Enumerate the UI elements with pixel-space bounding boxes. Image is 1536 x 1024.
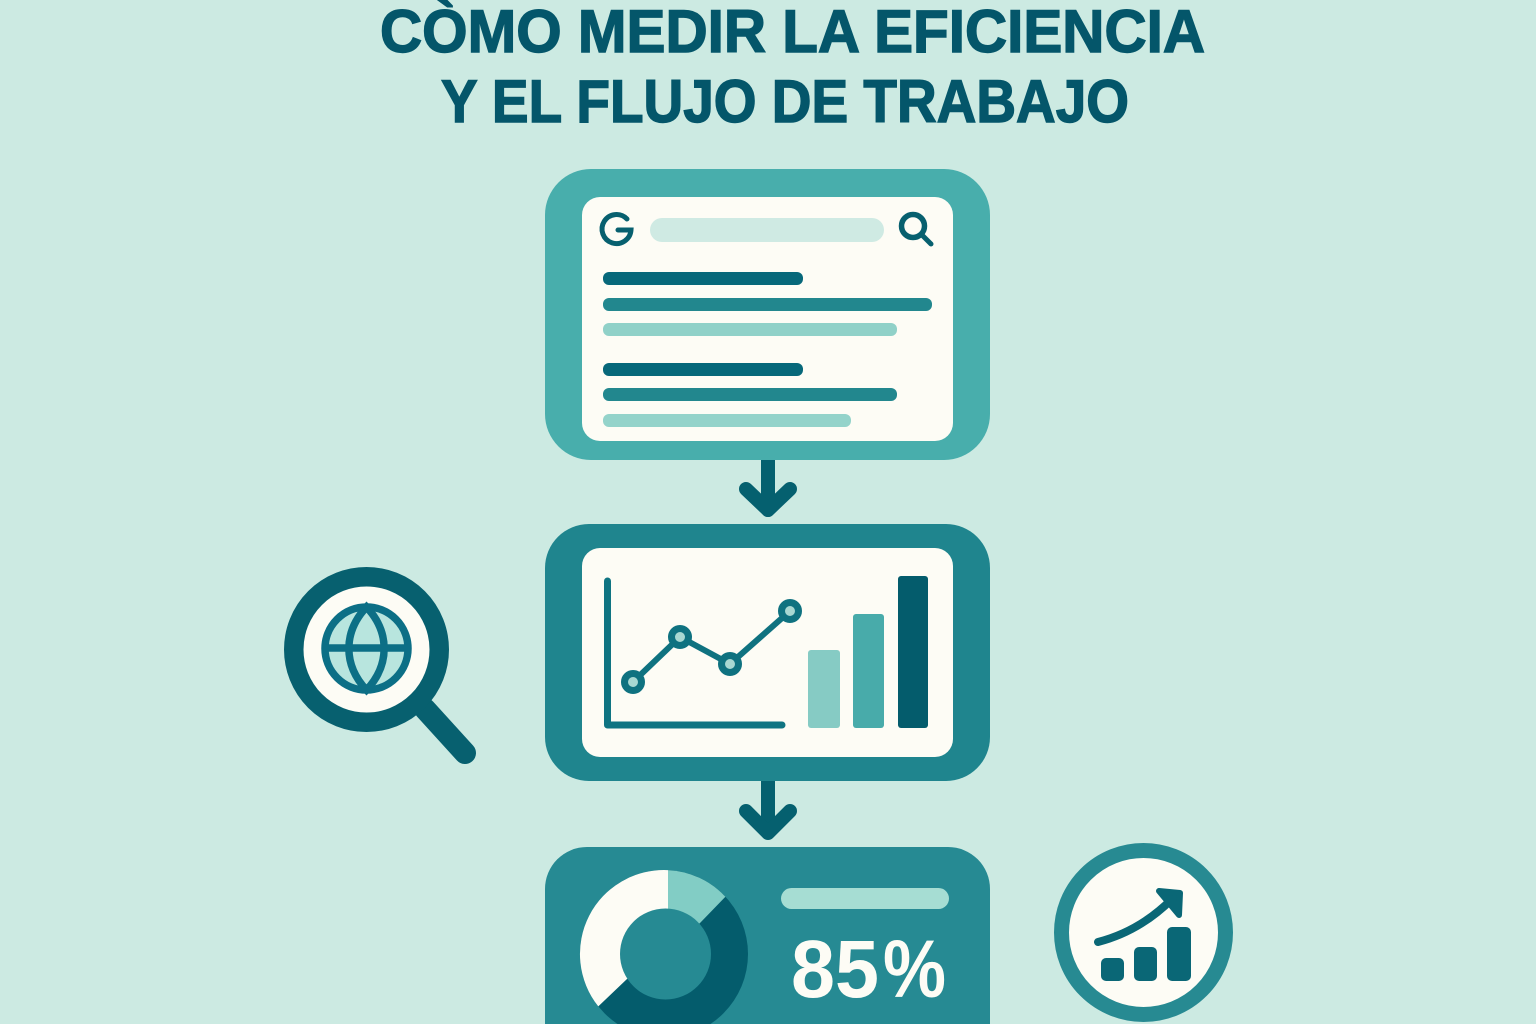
growth arrow — [1098, 891, 1180, 942]
result block 1 — [603, 272, 932, 336]
panel: efficiency result — [545, 847, 990, 1024]
arrow: search to analytics — [746, 460, 790, 510]
icon: magnifier with globe — [294, 577, 465, 753]
percentage value — [791, 924, 946, 1015]
search bar — [650, 218, 884, 242]
icon: G logo — [602, 215, 631, 244]
title: CÒMO MEDIR LA EFICIENCIA — [380, 0, 1205, 65]
icon: search magnifier — [902, 214, 931, 244]
label bar — [781, 888, 949, 909]
percentage value: 85 — [791, 924, 879, 1015]
growth bars — [1101, 927, 1191, 981]
globe — [325, 607, 408, 690]
percentage value: % — [883, 924, 946, 1015]
arrow: analytics to result — [746, 781, 790, 833]
bar chart — [808, 576, 928, 728]
title: Y EL FLUJO DE TRABAJO — [441, 68, 1129, 135]
line chart — [624, 602, 798, 690]
panel: analytics chart — [545, 524, 990, 781]
chart axes — [608, 581, 782, 725]
title — [380, 0, 1205, 135]
icon: growth chart badge — [1062, 850, 1226, 1014]
panel: search results — [545, 169, 990, 460]
donut chart — [580, 870, 748, 1024]
result block 2 — [603, 363, 897, 427]
